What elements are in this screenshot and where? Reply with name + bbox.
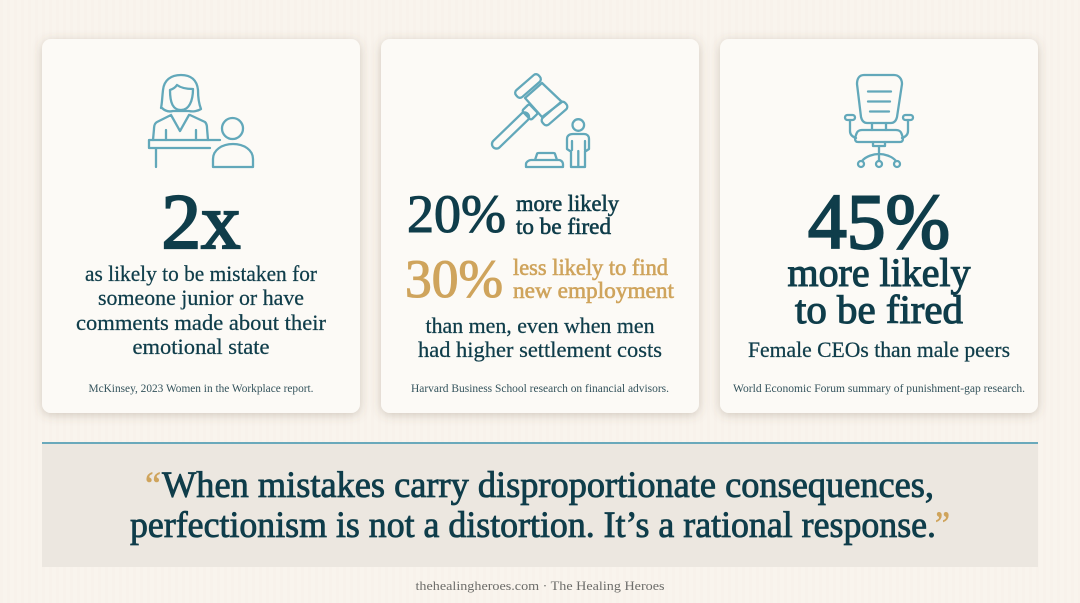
source: Harvard Business School research on financial advisors. — [411, 383, 669, 395]
quote text: When mistakes carry disproportionate consequences, — [162, 465, 934, 506]
icon: woman at desk with junior person — [149, 75, 253, 167]
panel: 45% card — [720, 39, 1038, 413]
text: description: someone junior or have — [98, 285, 304, 310]
stat: 30%: 30% — [405, 249, 503, 309]
panel: 2x card — [42, 39, 360, 413]
stat: 20%: 20% — [407, 184, 506, 244]
text: description: as likely to be mistaken for — [85, 261, 318, 286]
label: less likely to find new employment: less likely to find — [513, 255, 668, 280]
text: subject: Female CEOs than male peers — [748, 337, 1010, 362]
panel: 20% and 30% card — [381, 39, 699, 413]
quote text: ” — [935, 505, 950, 546]
text: comparison — [418, 313, 662, 362]
icon: office chair — [845, 75, 913, 167]
icon: gavel and person — [490, 73, 589, 167]
label: more likely to be fired — [516, 191, 619, 239]
text: comparison: than men, even when men — [426, 313, 654, 338]
label: more likely to be fired: more likely — [788, 250, 970, 295]
text: description: emotional state — [132, 334, 270, 359]
quote text: perfectionism is not a distortion. It’s a rational response. — [130, 505, 936, 546]
source: World Economic Forum summary of punishment-gap research. — [733, 383, 1025, 395]
quote text: “ — [145, 465, 161, 506]
source: McKinsey, 2023 Women in the Workplace report. — [88, 383, 314, 395]
text: description — [76, 261, 327, 359]
text: description: comments made about their — [76, 310, 327, 335]
stat: 45%: 45% — [808, 178, 950, 265]
label: more likely to be fired — [788, 250, 970, 332]
label: more likely to be fired: to be fired — [516, 214, 612, 239]
label: less likely to find new employment — [513, 255, 675, 303]
stat: 2x: 2x — [162, 178, 240, 265]
footer: thehealingheroes.com · The Healing Heroes — [416, 578, 664, 593]
label: more likely to be fired: to be fired — [795, 287, 963, 332]
quote band — [42, 442, 1038, 567]
quote text — [130, 465, 950, 546]
label: more likely to be fired: more likely — [516, 191, 619, 216]
label: less likely to find new employment: new employment — [513, 278, 675, 303]
text: comparison: had higher settlement costs — [418, 337, 662, 362]
